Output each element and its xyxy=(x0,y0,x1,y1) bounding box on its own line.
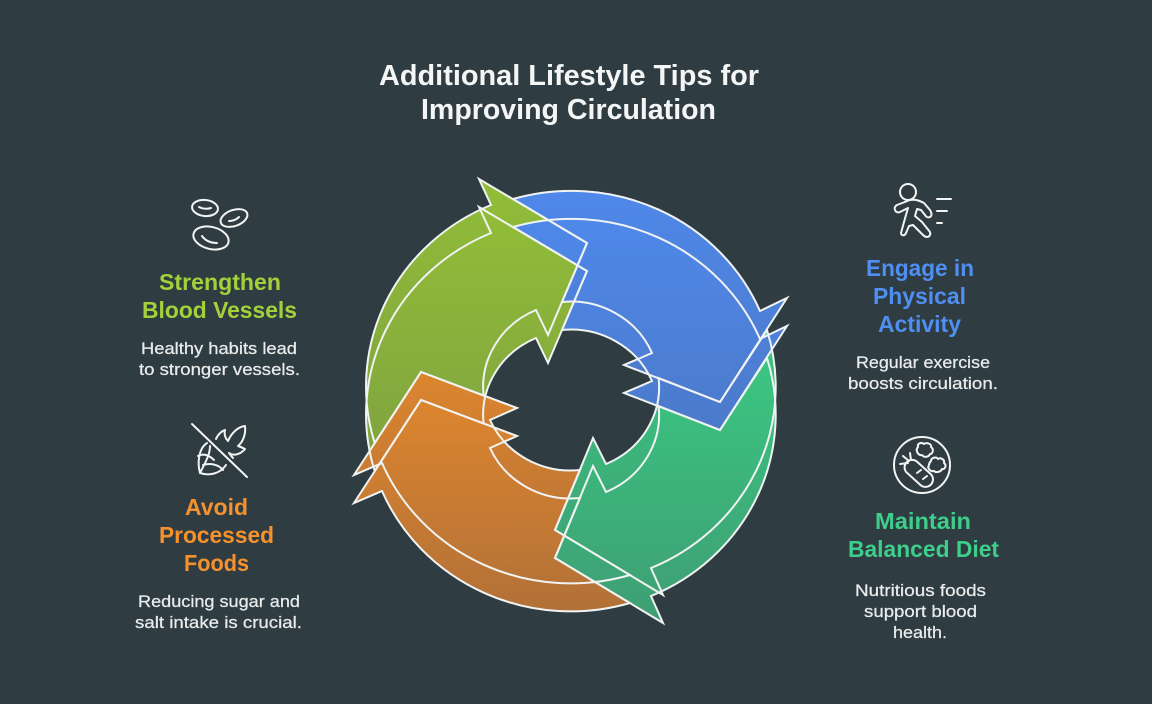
title: Additional Lifestyle Tips for xyxy=(379,60,759,92)
heading: Avoid xyxy=(185,494,248,520)
arrow: maintain balanced diet (green) xyxy=(555,330,776,623)
description xyxy=(135,592,302,632)
arrow: engage in physical activity (blue) xyxy=(513,191,787,430)
description xyxy=(855,581,986,642)
arrow: strengthen blood vessels (olive) xyxy=(366,179,587,471)
label: strengthen blood vessels xyxy=(139,269,300,379)
heading: Foods xyxy=(184,550,249,576)
heading xyxy=(848,508,999,562)
heading: Processed xyxy=(159,522,274,548)
title: Improving Circulation xyxy=(421,94,716,126)
description: to stronger vessels. xyxy=(139,360,300,379)
label: engage in physical activity xyxy=(848,255,998,393)
heading xyxy=(159,494,274,576)
heading: Balanced Diet xyxy=(848,536,999,562)
icon: blood cells xyxy=(191,199,250,253)
description: health. xyxy=(893,623,947,642)
label: maintain balanced diet xyxy=(848,508,999,642)
heading: Maintain xyxy=(875,508,971,534)
arrow: avoid processed foods (orange) xyxy=(354,372,630,611)
description xyxy=(139,339,300,379)
description: salt intake is crucial. xyxy=(135,613,302,632)
heading xyxy=(866,255,974,337)
icon: runner xyxy=(895,184,951,237)
title xyxy=(379,60,759,126)
heading: Strengthen xyxy=(159,269,281,295)
cycle diagram xyxy=(354,179,787,623)
heading: Engage in xyxy=(866,255,974,281)
heading: Blood Vessels xyxy=(142,297,297,323)
icon: vegetables in a circle xyxy=(894,437,950,493)
label: avoid processed foods xyxy=(135,494,302,632)
heading xyxy=(142,269,297,323)
description: Reducing sugar and xyxy=(138,592,300,611)
description: support blood xyxy=(864,602,977,621)
description: boosts circulation. xyxy=(848,374,998,393)
description xyxy=(848,353,998,393)
arrow outlines xyxy=(354,179,787,623)
heading: Activity xyxy=(878,311,961,337)
description: Healthy habits lead xyxy=(141,339,297,358)
description: Regular exercise xyxy=(856,353,990,372)
icon: crossed-out food xyxy=(192,424,247,477)
heading: Physical xyxy=(873,283,966,309)
description: Nutritious foods xyxy=(855,581,986,600)
